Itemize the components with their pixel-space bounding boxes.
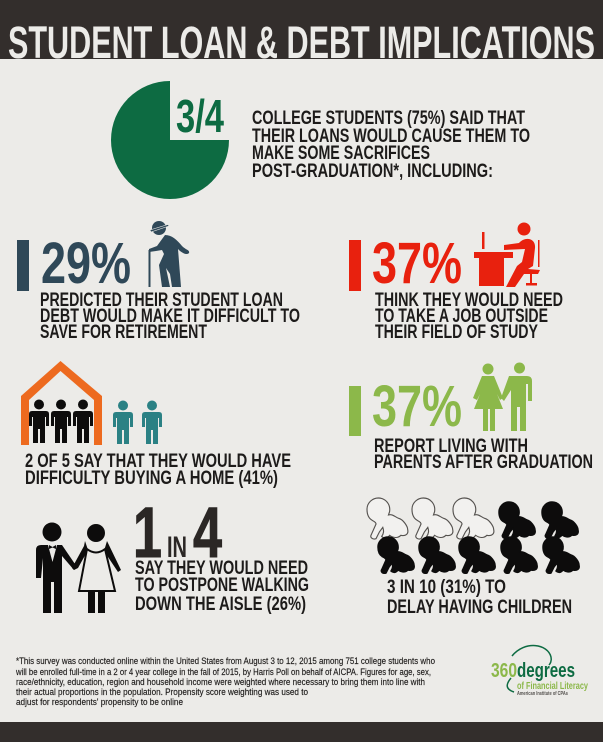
description: home: [25, 451, 291, 489]
footnote: [15, 656, 435, 707]
panel: living with parents: [349, 362, 593, 473]
icon: two teal people: [113, 400, 162, 444]
description: job: TO TAKE A JOB OUTSIDE: [375, 306, 548, 327]
accent bar: retirement: [17, 240, 29, 291]
description: parents: REPORT LIVING WITH: [374, 436, 528, 457]
icon: black babies: [378, 502, 579, 573]
footer band: [0, 722, 603, 742]
header band: [0, 0, 603, 59]
stat: 37% job: 37%: [372, 231, 462, 296]
intro text: [252, 108, 530, 182]
stat: 37% parents: 37%: [372, 374, 462, 439]
panel: job outside field: [349, 222, 563, 343]
icon: bride and groom: [36, 522, 121, 613]
accent bar: parents: [349, 386, 361, 436]
footnote: their actual proportions in the population. Propensity score weighting was used to: [16, 687, 308, 697]
description: home: DIFFICULTY BUYING A HOME (41%): [25, 468, 278, 489]
description: aisle: DOWN THE AISLE (26%): [135, 594, 306, 615]
intro text: POST-GRADUATION*, INCLUDING:: [252, 161, 493, 182]
description: aisle: SAY THEY WOULD NEED: [135, 558, 308, 579]
icon: couple: [473, 362, 532, 431]
logo: 360 degrees of Financial Literacy: 360: [491, 660, 517, 682]
stat: 1 in 4: IN: [167, 531, 187, 564]
icon: person at desk: [474, 222, 540, 287]
footnote: race/ethnicity, education, region and household income were weighted where necessary to bring them into line with: [16, 677, 425, 687]
icon: house outline: [21, 361, 102, 445]
description: retirement: [40, 290, 300, 343]
description: job: [375, 290, 563, 343]
description: aisle: TO POSTPONE WALKING: [135, 575, 309, 596]
logo: 360 degrees of Financial Literacy: American Institute of CPAs: [517, 691, 568, 697]
intro text: MAKE SOME SACRIFICES: [252, 143, 430, 164]
description: children: 3 IN 10 (31%) TO: [387, 577, 506, 598]
description: job: THEIR FIELD OF STUDY: [375, 322, 538, 343]
logo: 360 degrees of Financial Literacy: degrees: [517, 660, 575, 682]
panel: walking down the aisle: [36, 494, 309, 615]
description: parents: [374, 436, 593, 473]
stat: 1 in 4: [133, 494, 222, 573]
description: retirement: PREDICTED THEIR STUDENT LOAN: [40, 290, 283, 311]
panel: retirement: [17, 221, 300, 343]
pie label 3/4: 3/4: [176, 90, 224, 142]
footnote: adjust for respondents' propensity to be online: [16, 697, 183, 707]
description: aisle: [135, 558, 309, 615]
logo: 360 degrees of Financial Literacy: [491, 646, 588, 697]
description: retirement: DEBT WOULD MAKE IT DIFFICULT TO: [40, 306, 300, 327]
intro text: COLLEGE STUDENTS (75%) SAID THAT: [252, 108, 525, 129]
footnote: will be enrolled full-time in a 2 or 4 year college in the fall of 2015, by Harris Poll on behalf of AICPA. Figures for age, sex,: [15, 667, 431, 677]
icon: three black people: [29, 400, 93, 443]
icon: white babies: [367, 498, 494, 539]
stat: 1 in 4: 1: [133, 494, 162, 573]
footnote: *This survey was conducted online within the United States from August 3 to 12, 2015 among 751 college students who: [16, 656, 435, 666]
pie chart: three quarters: [111, 81, 229, 199]
description: retirement: SAVE FOR RETIREMENT: [40, 322, 207, 343]
stat: 1 in 4: 4: [193, 494, 222, 573]
description: home: 2 OF 5 SAY THAT THEY WOULD HAVE: [25, 451, 291, 472]
accent bar: job: [349, 240, 361, 291]
panel: delay having children: [367, 498, 579, 618]
description: children: [387, 577, 572, 618]
stat: 29%: 29%: [41, 231, 131, 296]
panel: buying a home: [21, 361, 291, 489]
icon: old man with cane: [148, 221, 189, 287]
